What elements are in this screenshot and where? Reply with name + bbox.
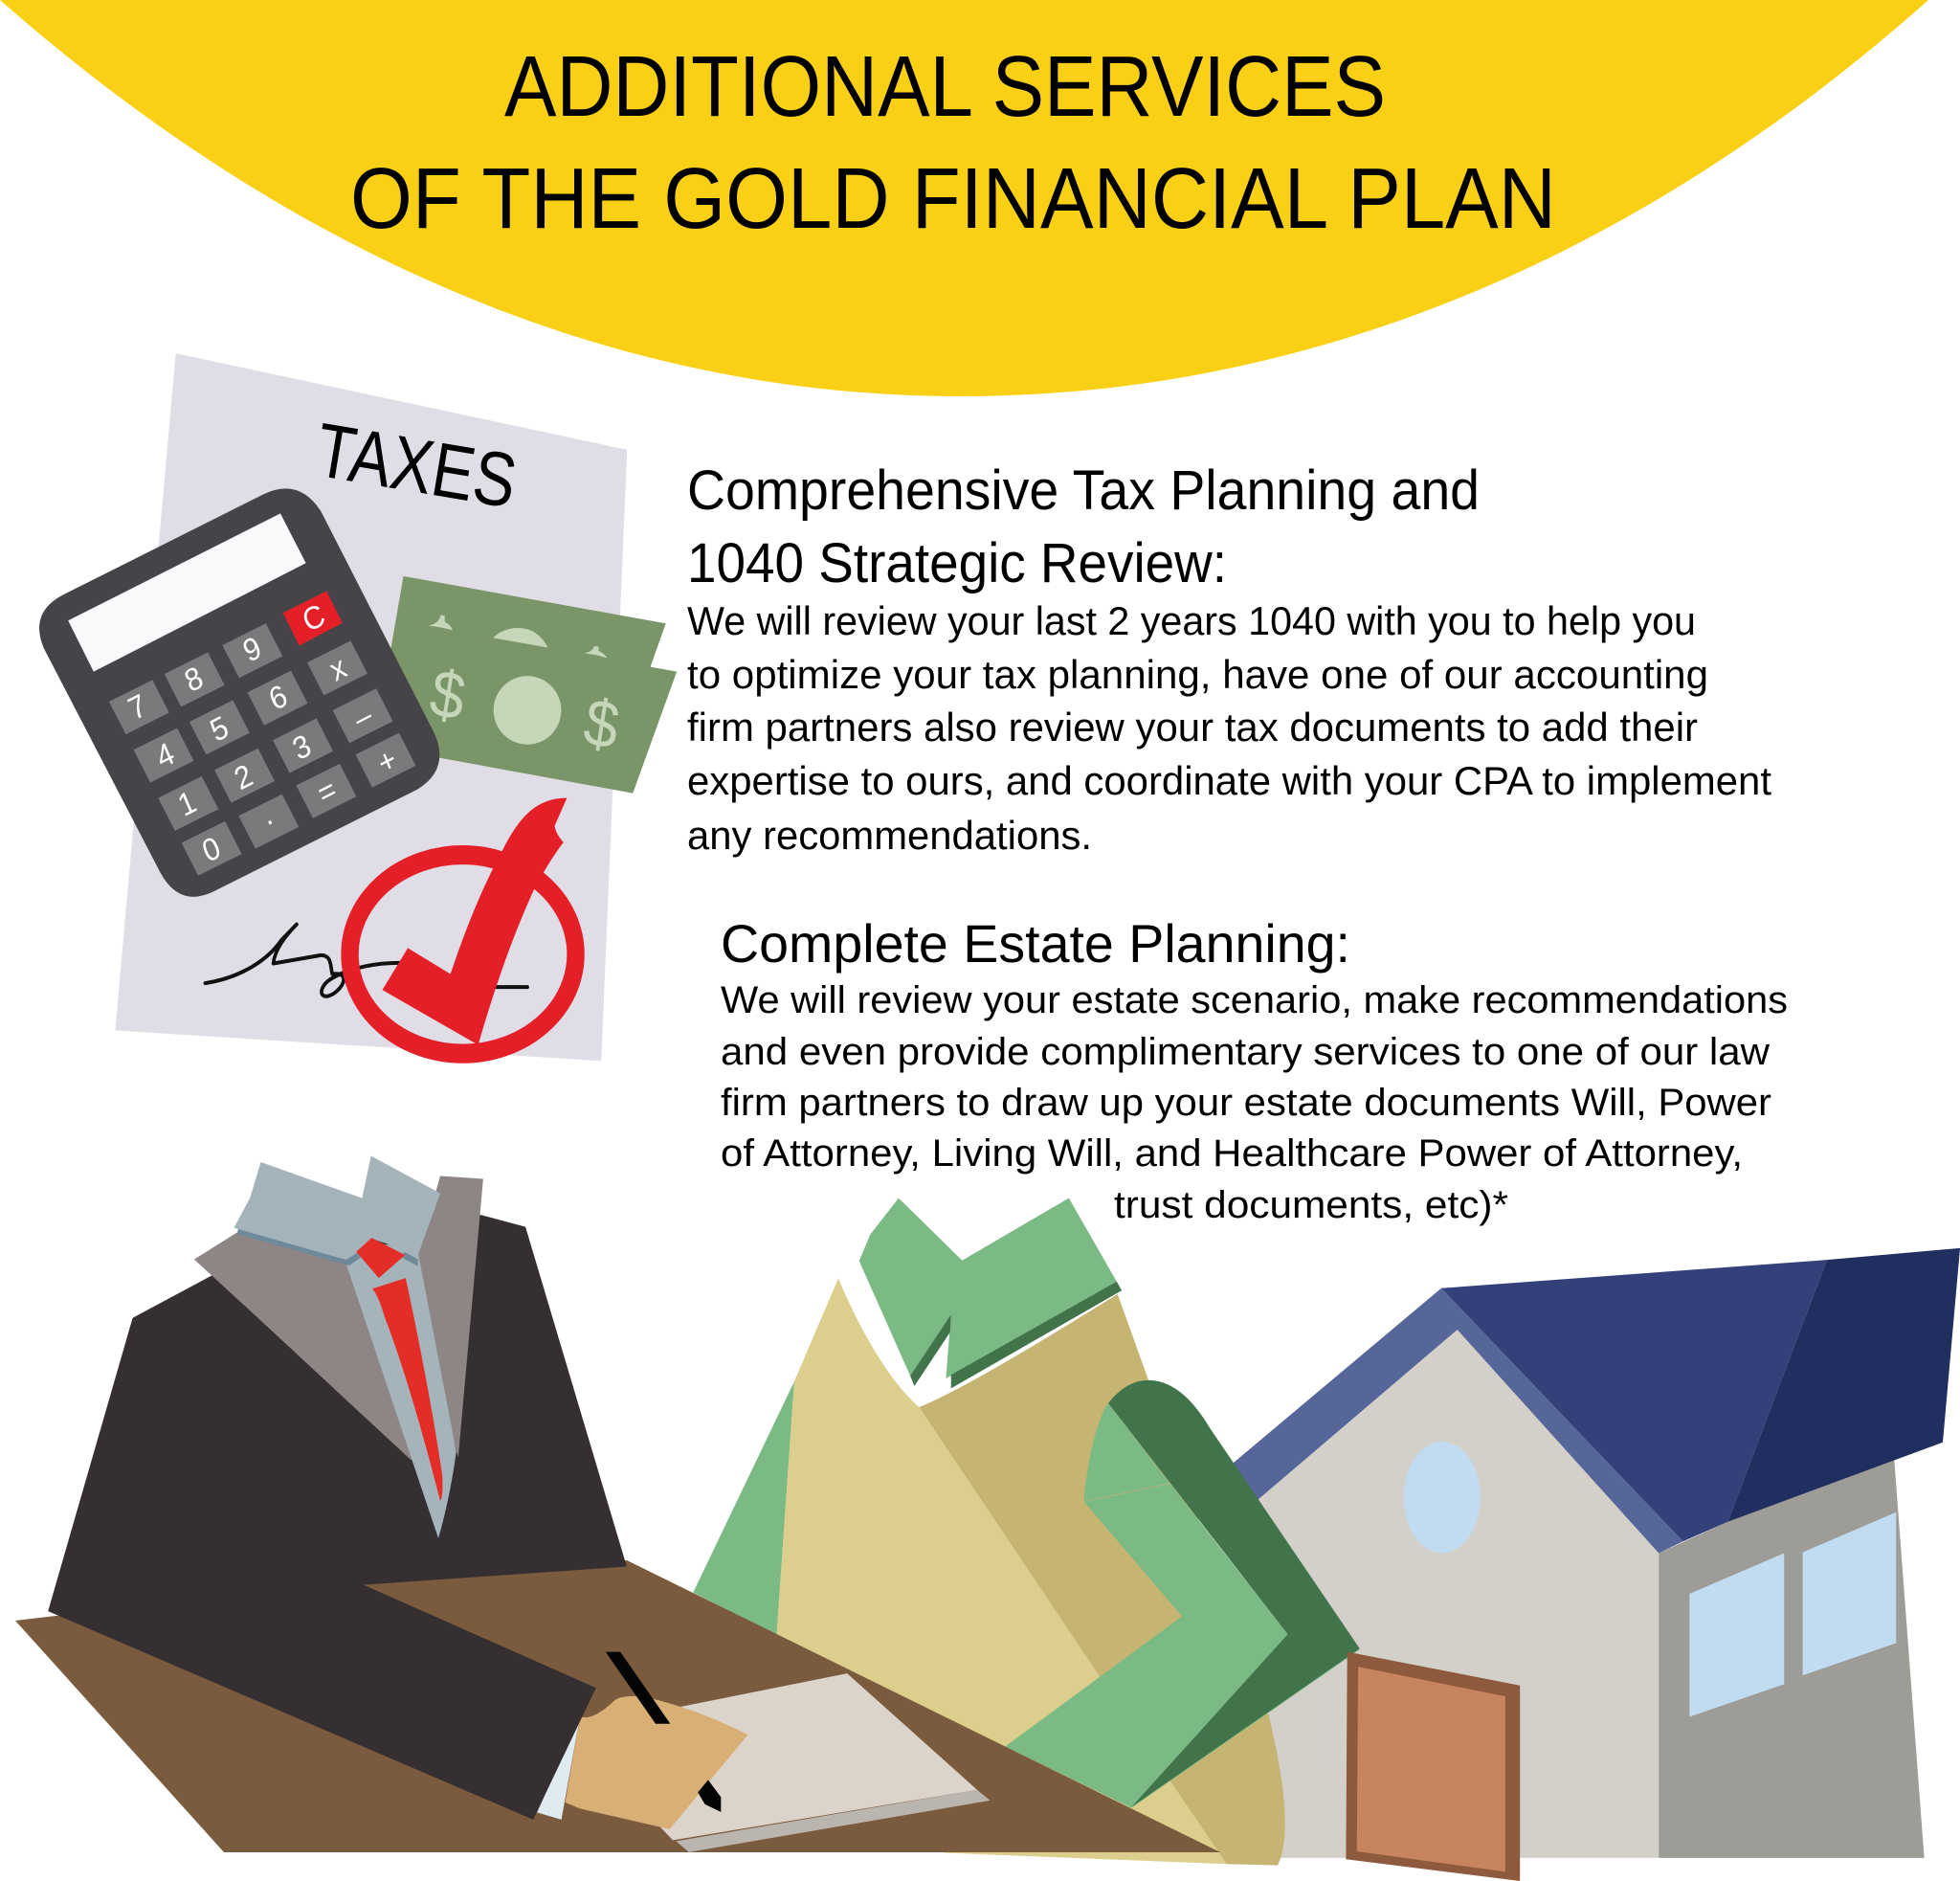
title: [350, 39, 1556, 247]
tax planning heading: [687, 459, 1480, 594]
right lapel: [411, 1176, 483, 1458]
title: ADDITIONAL SERVICES: [504, 39, 1386, 135]
calculator: 7: [123, 687, 151, 727]
top green flap: [859, 1198, 1117, 1378]
calculator: x: [324, 649, 351, 688]
calculator: 9: [237, 629, 266, 669]
calculator: 1: [173, 783, 201, 823]
side windows: [1689, 1512, 1896, 1717]
tax planning body text: We will review your last 2 years 1040 with you to help you: [687, 598, 1696, 643]
tax planning heading: 1040 Strategic Review:: [687, 532, 1227, 594]
paper on desk: [660, 1673, 977, 1840]
calculator: –: [348, 696, 377, 736]
estate planning heading: Complete Estate Planning:: [721, 913, 1350, 974]
estate planning body text: [721, 979, 1788, 1226]
roof: [1441, 1260, 1827, 1541]
dollar bills: $: [425, 656, 470, 735]
illustration: desk with businessman signing: [15, 1156, 1220, 1852]
pen nib: [698, 1780, 721, 1812]
estate planning body text: firm partners to draw up your estate documents Will, Power: [721, 1082, 1771, 1124]
estate planning body text: and even provide complimentary services to one of our law: [721, 1031, 1770, 1073]
folder back green: [693, 1381, 794, 1635]
calculator: [39, 488, 439, 897]
shirt: [340, 1244, 457, 1538]
left lapel: [194, 1232, 423, 1465]
title: OF THE GOLD FINANCIAL PLAN: [350, 151, 1556, 247]
calculator: .: [256, 795, 278, 832]
red circled check mark: [350, 798, 576, 1054]
tax planning body text: [687, 598, 1771, 858]
collar: [234, 1156, 440, 1260]
calculator: C: [297, 596, 330, 638]
tax planning heading: Comprehensive Tax Planning and: [687, 459, 1480, 522]
paper shadow: [676, 1790, 991, 1852]
suit jacket: [48, 1215, 627, 1820]
gable trim: [1234, 1288, 1683, 1554]
flap crease line: [1083, 1484, 1170, 1501]
estate planning body text: of Attorney, Living Will, and Healthcare Power of Attorney,: [721, 1132, 1743, 1175]
header: yellow arc banner: [0, 0, 1928, 396]
calculator: +: [372, 741, 402, 781]
tie knot: [356, 1238, 405, 1278]
hand: [566, 1696, 747, 1829]
signature: [205, 925, 527, 996]
tax form sheet: [115, 353, 627, 1061]
calculator: 5: [205, 708, 234, 749]
tax planning body text: expertise to ours, and coordinate with your CPA to implement: [687, 758, 1771, 803]
calculator: 4: [151, 735, 179, 775]
calculator: 6: [264, 677, 292, 717]
illustration: house: [1213, 1248, 1960, 1858]
illustration: tax document with calculator, money and check mark: [39, 353, 677, 1061]
calculator: 2: [229, 757, 257, 796]
pen: [606, 1652, 670, 1724]
tax planning body text: firm partners also review your tax documents to add their: [687, 705, 1698, 750]
illustration: estate document folder: [693, 1198, 1360, 1866]
front wall: [1213, 1330, 1659, 1858]
calculator: 3: [287, 727, 316, 767]
roof shaded side: [1727, 1248, 1960, 1522]
desk: [15, 1560, 1220, 1852]
house door: [1346, 1652, 1520, 1881]
tie: [372, 1278, 442, 1501]
front flap dark green: [1108, 1380, 1360, 1807]
estate planning body text: trust documents, etc)*: [1114, 1184, 1508, 1226]
tax planning body text: to optimize your tax planning, have one of our accounting: [687, 652, 1708, 697]
calculator: =: [312, 771, 342, 812]
oval window: [1404, 1442, 1481, 1554]
dollar bills: $: [579, 684, 624, 764]
front flap light green: [1005, 1403, 1360, 1808]
TAXES label: TAXES: [310, 407, 523, 524]
tax planning body text: any recommendations.: [687, 813, 1092, 858]
darker document page: [919, 1294, 1285, 1866]
flap shadow: [910, 1282, 1122, 1388]
dollar bills: [387, 576, 677, 794]
estate planning body text: We will review your estate scenario, make recommendations: [721, 979, 1788, 1021]
calculator: 8: [179, 659, 208, 699]
collar shadow: [237, 1228, 418, 1266]
side wall: [1659, 1459, 1925, 1858]
shirt cuff: [537, 1716, 580, 1820]
light document page: [776, 1278, 1227, 1864]
calculator: 0: [197, 829, 226, 869]
